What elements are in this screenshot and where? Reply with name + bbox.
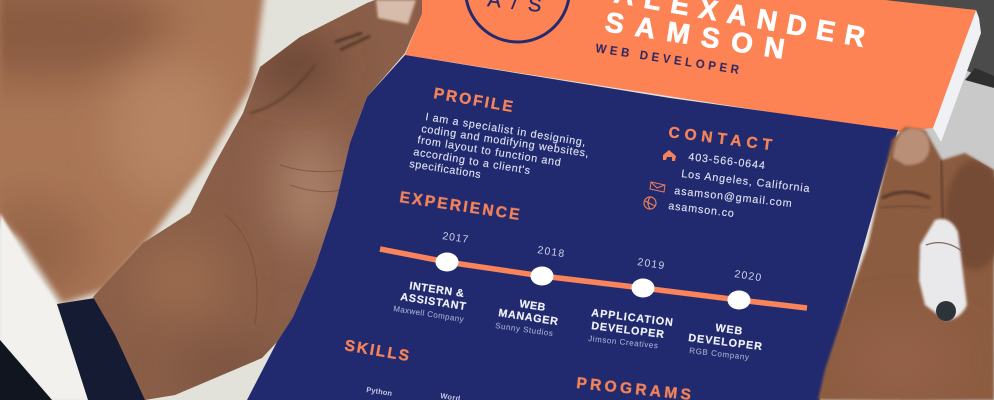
icon: home — [663, 150, 676, 161]
resume paper — [247, 0, 981, 400]
profile section: PROFILE — [432, 85, 514, 116]
job: intern and assistant: Maxwell Company — [393, 304, 464, 324]
job: application developer: DEVELOPER — [591, 320, 665, 341]
job: web manager — [495, 298, 559, 338]
skills section: Python — [366, 385, 393, 398]
timeline years: 2017 — [442, 230, 469, 246]
thumbnail — [893, 128, 929, 165]
timeline years: 2019 — [637, 256, 665, 272]
skills section: SKILLS — [343, 337, 410, 365]
white shirt collar — [0, 213, 92, 400]
blurred head — [0, 0, 266, 304]
job title: WEB DEVELOPER — [595, 43, 740, 77]
contact section: asamson.co — [668, 200, 735, 220]
navy sleeve — [57, 298, 146, 400]
pen tip — [936, 301, 956, 321]
right hand holding pen — [818, 127, 994, 400]
job: web developer: DEVELOPER — [688, 332, 763, 353]
thumbnail — [376, 0, 416, 24]
profile section: according to a client's — [413, 146, 531, 177]
job: application developer: APPLICATION — [591, 307, 674, 329]
job: web manager: Sunny Studios — [495, 321, 553, 338]
profile section — [409, 85, 589, 181]
pen — [919, 219, 967, 321]
profile section: coding and modifying websites, — [421, 123, 589, 160]
job: web manager: WEB — [519, 298, 546, 314]
profile section: I am a specialist in designing, — [425, 111, 586, 149]
icon: globe — [644, 197, 656, 209]
icon: mail — [650, 182, 665, 192]
experience section heading: EXPERIENCE — [398, 189, 521, 224]
dark jacket — [0, 340, 52, 400]
timeline — [380, 249, 807, 310]
job: intern and assistant: INTERN & — [409, 280, 465, 300]
job: web manager: MANAGER — [498, 307, 559, 328]
left hand holding the page — [93, 0, 422, 400]
name: SAMSON — [603, 6, 787, 65]
job: web developer: RGB Company — [689, 346, 749, 362]
profile section: specifications — [409, 158, 482, 181]
timeline years — [442, 230, 762, 284]
job: intern and assistant: ASSISTANT — [400, 291, 467, 313]
contact section: asamson@gmail.com — [674, 185, 792, 210]
paper edge — [933, 10, 981, 142]
contact section — [667, 124, 810, 220]
contact section: 403-566-0644 — [688, 151, 766, 172]
monogram circle — [466, 0, 570, 42]
contact section: CONTACT — [667, 124, 773, 154]
contact section: Los Angeles, California — [681, 168, 810, 195]
timeline years: 2018 — [537, 244, 565, 260]
job: application developer: Jimson Creatives — [588, 334, 658, 350]
job: web developer: WEB — [715, 322, 743, 338]
navy body — [247, 55, 898, 400]
skills section — [343, 337, 461, 400]
job: web developer — [688, 322, 763, 362]
timeline years: 2020 — [734, 268, 762, 284]
job: intern and assistant — [393, 280, 467, 324]
job: application developer — [588, 307, 674, 350]
profile section: from layout to function and — [417, 134, 562, 169]
orange header band — [405, 0, 976, 132]
